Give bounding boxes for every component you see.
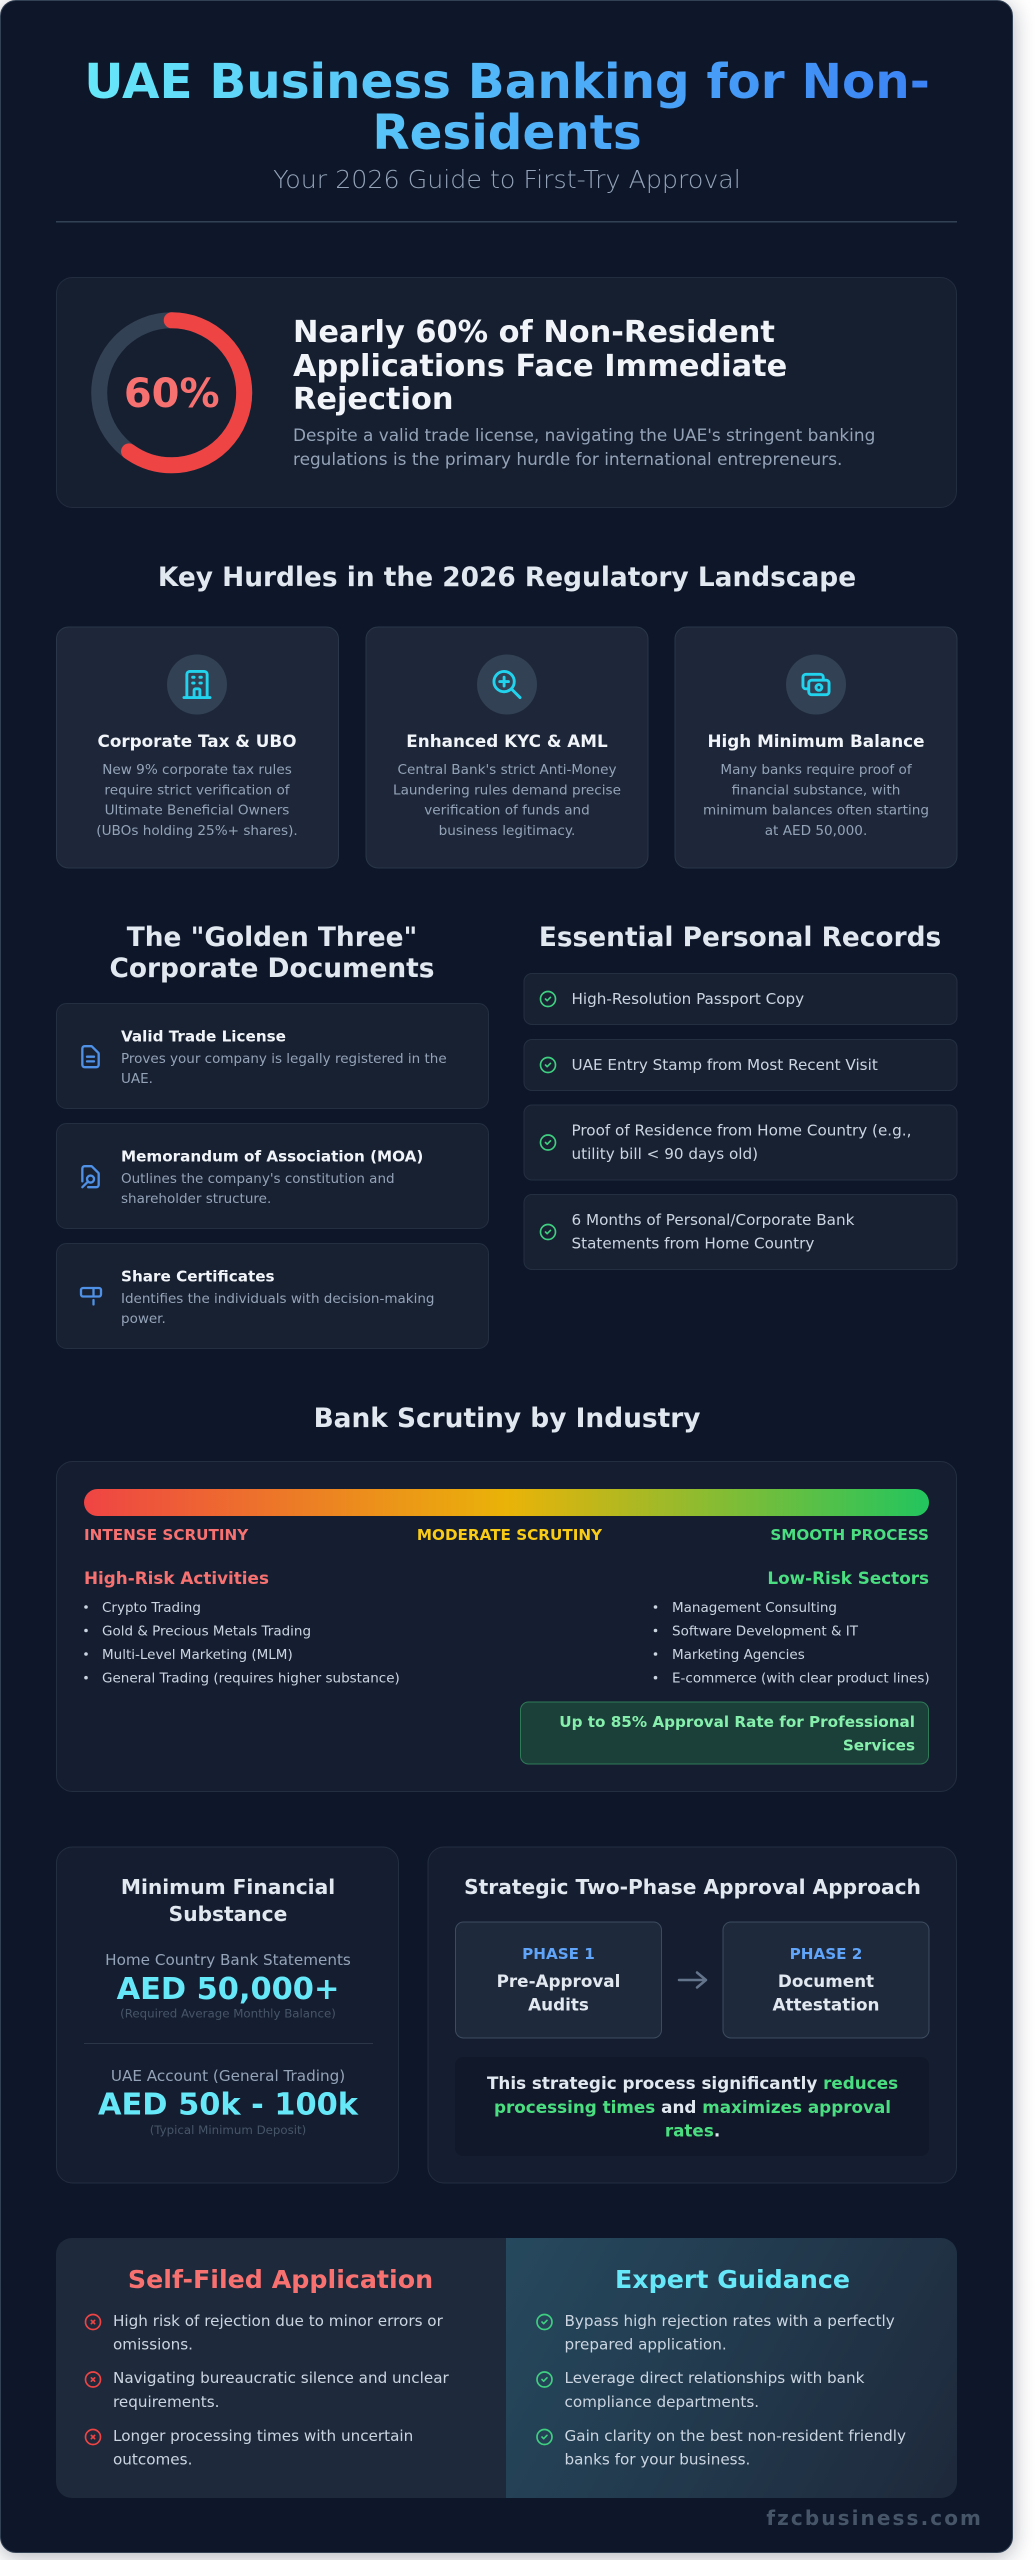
expert column: compliance departments. <box>564 2393 759 2411</box>
self-filed column: High risk of rejection due to minor errors or <box>113 2312 444 2330</box>
icon: magnifier <box>494 671 520 698</box>
panel: proof of residence: Proof of Residence from Home Country (e.g., <box>572 1122 911 1140</box>
panel: minimum financial substance <box>56 1847 398 2183</box>
phase 1 box <box>456 1922 662 2038</box>
stat: UAE account deposit: (Typical Minimum Deposit) <box>150 2123 306 2137</box>
panel: entry stamp <box>524 1040 957 1090</box>
high-risk list <box>84 1568 400 1687</box>
panel: 60 percent rejection stat <box>56 278 956 508</box>
low-risk list: Low-Risk Sectors <box>767 1568 929 1588</box>
phase 2 box <box>723 1922 929 2038</box>
panel: corporate tax and UBO: Corporate Tax & UBO <box>98 731 296 751</box>
icon: check <box>537 2430 552 2444</box>
panel: corporate tax and UBO: New 9% corporate tax rules <box>102 762 292 778</box>
panel: bank scrutiny by industry <box>56 1462 956 1792</box>
expert column <box>537 2265 906 2468</box>
icon: check <box>540 992 555 1006</box>
stat heading: Applications Face Immediate <box>293 349 787 384</box>
panel: memorandum of association: shareholder structure. <box>121 1191 271 1207</box>
panel: bank statements: 6 Months of Personal/Corporate Bank <box>572 1211 855 1229</box>
panel: passport copy <box>524 974 957 1024</box>
panel: corporate tax and UBO: (UBOs holding 25%+ shares). <box>96 823 298 839</box>
self-filed column: Longer processing times with uncertain <box>113 2427 413 2445</box>
stat: home country balance: Home Country Bank Statements <box>105 1951 351 1969</box>
arrow <box>679 1972 706 1988</box>
panel: high minimum balance: financial substance, with <box>732 782 900 798</box>
expert column: banks for your business. <box>564 2450 750 2468</box>
panel: enhanced KYC and AML <box>366 627 648 868</box>
expert column: Leverage direct relationships with bank <box>564 2369 865 2387</box>
stat: UAE account deposit <box>98 2067 359 2137</box>
panel: enhanced KYC and AML: Laundering rules demand precise <box>393 782 621 798</box>
stat heading: Rejection <box>293 382 454 417</box>
strategic note <box>455 2057 929 2156</box>
panel: passport copy: High-Resolution Passport Copy <box>572 990 804 1008</box>
panel: high minimum balance: minimum balances often starting <box>703 803 929 819</box>
strategic note: processing times and maximizes approval <box>494 2097 891 2117</box>
self-filed column: omissions. <box>113 2336 193 2354</box>
stat heading <box>293 315 787 417</box>
panel: share certificates <box>56 1244 488 1348</box>
icon: check <box>540 1135 555 1150</box>
stat: UAE account deposit: AED 50k - 100k <box>98 2088 359 2122</box>
panel: two-phase approach <box>428 1847 956 2183</box>
high-risk list: Gold & Precious Metals Trading <box>102 1624 311 1640</box>
panel: proof of residence: utility bill < 90 days old) <box>572 1145 758 1163</box>
scale labels: INTENSE SCRUTINY <box>84 1526 249 1544</box>
strategic note: rates. <box>665 2120 720 2140</box>
icon: cross <box>85 2372 100 2387</box>
low-risk list: Marketing Agencies <box>672 1647 805 1663</box>
low-risk list: E-commerce (with clear product lines) <box>672 1671 930 1687</box>
self-filed column: requirements. <box>113 2393 219 2411</box>
panel: high minimum balance: Many banks require proof of <box>720 762 913 778</box>
panel: corporate tax and UBO <box>56 627 338 868</box>
phase 2 box: Attestation <box>772 1994 880 2014</box>
panel: valid trade license: Proves your company is legally registered in the <box>121 1051 447 1067</box>
self-filed column <box>85 2265 450 2468</box>
expert column: Bypass high rejection rates with a perfectly <box>564 2312 895 2330</box>
high-risk list: High-Risk Activities <box>84 1568 269 1588</box>
panel: share certificates: Identifies the individuals with decision-making <box>121 1291 434 1307</box>
title: Residents <box>372 105 642 161</box>
phase 1 box: PHASE 1 <box>522 1945 595 1963</box>
heading: golden three: Corporate Documents <box>109 953 435 984</box>
scale labels <box>84 1526 929 1544</box>
phase 1 box: Audits <box>528 1994 589 2014</box>
icon: check <box>540 1058 555 1072</box>
phase 2 box: Document <box>778 1971 874 1991</box>
panel: bank statements <box>524 1194 957 1270</box>
heading: personal records: Essential Personal Records <box>539 922 941 953</box>
self-filed column: outcomes. <box>113 2450 192 2468</box>
icon: check <box>537 2315 552 2329</box>
self-filed column: Navigating bureaucratic silence and unclear <box>113 2369 450 2387</box>
panel: entry stamp: UAE Entry Stamp from Most Recent Visit <box>572 1056 878 1074</box>
icon: certificate <box>81 1288 101 1304</box>
heading: golden three: The "Golden Three" <box>127 922 417 953</box>
phase 2 box: PHASE 2 <box>790 1945 862 1963</box>
donut chart: 60%: 60% <box>124 371 220 417</box>
heading: key hurdles: Key Hurdles in the 2026 Regulatory Landscape <box>158 562 856 593</box>
scrutiny gradient bar <box>84 1489 929 1516</box>
icon: building <box>184 671 210 698</box>
stat: home country balance: (Required Average Monthly Balance) <box>120 2006 336 2020</box>
icon: document search <box>82 1166 99 1187</box>
low-risk list: Management Consulting <box>672 1600 837 1616</box>
strategic note: This strategic process significantly reduces <box>487 2073 898 2093</box>
panel: enhanced KYC and AML: Central Bank's strict Anti-Money <box>397 762 617 778</box>
icon: cross <box>85 2315 100 2329</box>
scale labels: MODERATE SCRUTINY <box>417 1526 603 1544</box>
panel: memorandum of association: Memorandum of Association (MOA) <box>121 1148 423 1166</box>
panel: enhanced KYC and AML: verification of funds and <box>424 803 590 819</box>
icon: cross <box>85 2430 100 2444</box>
high-risk list: Crypto Trading <box>102 1600 201 1616</box>
panel: corporate tax and UBO: Ultimate Beneficial Owners <box>105 803 289 819</box>
panel: valid trade license <box>56 1004 488 1108</box>
callout: approval rate: Services <box>843 1736 915 1754</box>
expert column: Gain clarity on the best non-resident friendly <box>564 2427 906 2445</box>
panel: two-phase approach: Strategic Two-Phase Approval Approach <box>464 1875 921 1899</box>
panel: proof of residence <box>524 1105 957 1180</box>
heading: golden three <box>109 922 435 984</box>
header divider <box>56 221 957 222</box>
panel: share certificates: Share Certificates <box>121 1268 275 1286</box>
high-risk list: Multi-Level Marketing (MLM) <box>102 1647 293 1663</box>
panel: bank statements: Statements from Home Country <box>572 1234 814 1252</box>
high-risk list: General Trading (requires higher substance) <box>102 1671 400 1687</box>
panel: enhanced KYC and AML: Enhanced KYC & AML <box>406 731 608 751</box>
low-risk list: Software Development & IT <box>672 1624 859 1640</box>
panel: corporate tax and UBO: require strict verification of <box>104 782 291 798</box>
title: UAE Business Banking for Non- <box>84 54 930 110</box>
panel: high minimum balance: at AED 50,000. <box>765 823 867 839</box>
donut chart: 60% <box>99 320 244 465</box>
scale labels: SMOOTH PROCESS <box>770 1526 929 1544</box>
self-filed column: Self-Filed Application <box>128 2265 433 2294</box>
heading: bank scrutiny: Bank Scrutiny by Industry <box>314 1403 700 1434</box>
panel: comparison <box>56 2238 957 2498</box>
panel: memorandum of association <box>56 1124 488 1228</box>
callout: approval rate <box>520 1702 928 1764</box>
panel: minimum financial substance: Minimum Financial <box>121 1875 335 1899</box>
stat: home country balance: AED 50,000+ <box>117 1972 339 2007</box>
icon: check <box>540 1225 555 1239</box>
low-risk list <box>654 1568 930 1687</box>
panel: minimum financial substance: Substance <box>169 1902 287 1926</box>
expert column: Expert Guidance <box>615 2265 850 2294</box>
stat: home country balance <box>105 1951 351 2020</box>
stat description: regulations is the primary hurdle for international entrepreneurs. <box>293 449 842 469</box>
panel: valid trade license: Valid Trade License <box>121 1028 286 1046</box>
title <box>84 54 930 161</box>
callout: approval rate: Up to 85% Approval Rate for Professional <box>559 1713 915 1731</box>
panel: enhanced KYC and AML: business legitimacy. <box>439 823 575 839</box>
panel: share certificates: power. <box>121 1311 166 1327</box>
watermark: fzcbusiness.com <box>766 2506 983 2530</box>
icon: cash <box>803 674 829 695</box>
stat heading: Nearly 60% of Non-Resident <box>293 315 775 350</box>
panel: valid trade license: UAE. <box>121 1071 153 1087</box>
subtitle: Your 2026 Guide to First-Try Approval <box>273 165 741 194</box>
stat description <box>293 425 875 469</box>
icon: document <box>82 1046 99 1067</box>
panel: high minimum balance <box>675 627 957 868</box>
stat: UAE account deposit: UAE Account (General Trading) <box>111 2067 345 2085</box>
phase 1 box: Pre-Approval <box>497 1971 620 1991</box>
panel: memorandum of association: Outlines the company's constitution and <box>121 1171 395 1187</box>
stat description: Despite a valid trade license, navigating the UAE's stringent banking <box>293 425 875 445</box>
icon: check <box>537 2372 552 2387</box>
panel: high minimum balance: High Minimum Balance <box>708 731 924 751</box>
expert column: prepared application. <box>564 2336 727 2354</box>
